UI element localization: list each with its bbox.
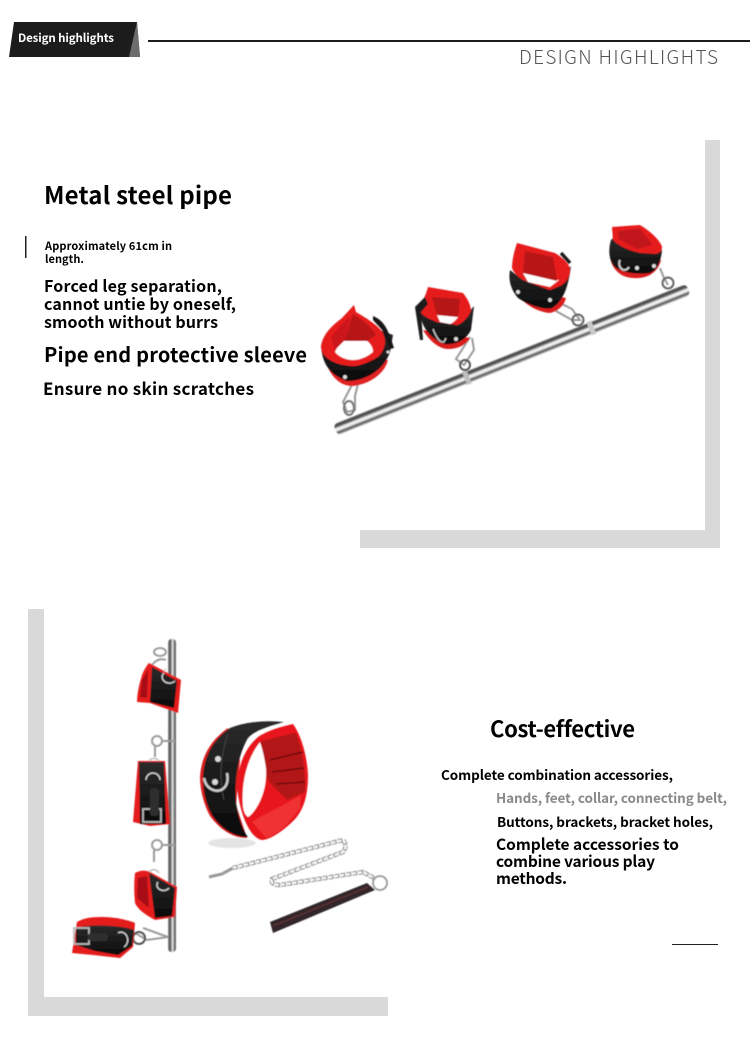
cuff 1	[321, 305, 394, 386]
steel bar	[333, 283, 691, 436]
cuff C	[134, 870, 177, 920]
heading: Pipe end protective sleeve: Pipe end protective sleeve	[44, 339, 307, 368]
cuff B	[133, 758, 170, 826]
footer accent rule	[672, 944, 718, 945]
cuff A	[137, 663, 181, 713]
text block: leg separation: cannot untie by oneself,	[44, 291, 236, 315]
accent tick	[25, 236, 26, 258]
panel frame: bottom L-shaped grey border	[28, 609, 388, 1016]
text block: play methods: combine various play	[496, 850, 655, 872]
text block: accessories list	[441, 764, 727, 831]
header tag: Design highlights	[9, 22, 140, 57]
header rule	[148, 40, 750, 42]
cuff 3	[509, 243, 571, 313]
text block: length: length.	[45, 251, 84, 267]
text block: leg separation: Forced leg separation,	[44, 273, 222, 297]
product photo: collar	[200, 721, 308, 848]
text: Ensure no skin scratches: Ensure no skin scratches	[43, 375, 254, 400]
clips	[133, 648, 175, 944]
chain clips	[343, 268, 674, 415]
product photo: spreader bar with four cuffs	[321, 225, 691, 436]
heading: Cost-effective: Cost-effective	[490, 712, 635, 744]
text block: accessories list: Buttons, brackets, bracket holes,	[497, 811, 713, 831]
text block: length	[44, 238, 172, 267]
text block: accessories list: Hands, feet, collar, connecting belt,	[496, 787, 727, 807]
text block: leg separation: smooth without burrs	[44, 309, 218, 333]
text block: length: Approximately 61cm in	[44, 238, 172, 254]
cuff 4	[609, 225, 662, 278]
vertical steel bar	[168, 639, 176, 952]
text block: leg separation	[44, 273, 236, 333]
text block: accessories list: Complete combination accessories,	[441, 764, 673, 784]
text block: play methods: methods.	[496, 867, 567, 889]
product photo: bar with four cuffs	[72, 639, 181, 958]
panel frame: top L-shaped grey border	[360, 140, 720, 548]
cuff D	[72, 917, 135, 958]
text block: play methods: Complete accessories to	[496, 833, 679, 855]
heading: Metal steel pipe: Metal steel pipe	[44, 176, 232, 211]
product photo: chain leash	[209, 840, 387, 933]
header tag: Design highlights: Design highlights	[18, 30, 114, 46]
header subtitle: DESIGN HIGHLIGHTS	[519, 43, 718, 70]
text block: play methods	[496, 833, 679, 889]
cuff 2	[415, 287, 474, 349]
